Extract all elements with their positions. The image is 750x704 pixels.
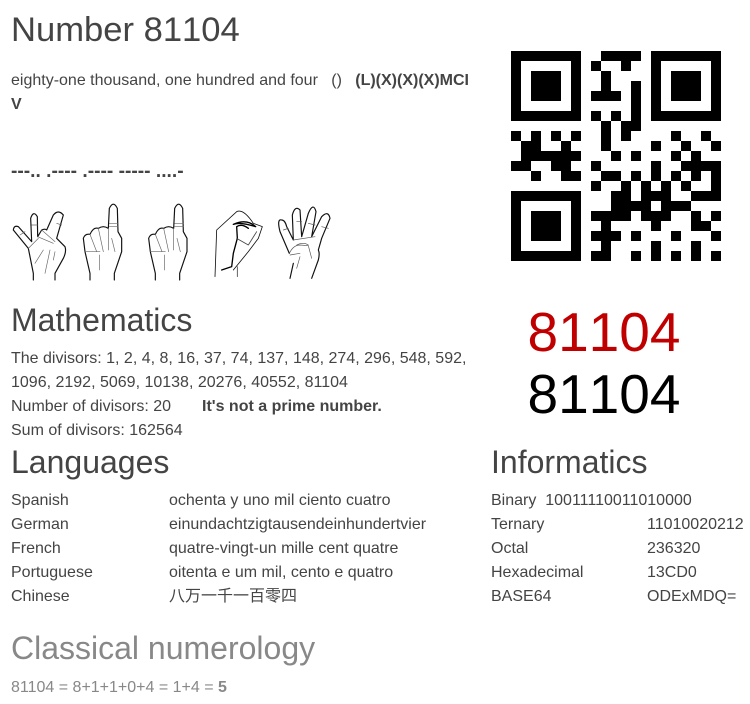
large number red: 81104: [528, 301, 680, 363]
number name in words and roman numeral: eighty-one thousand, one hundred and four () (L)(X)(X)(X)MCI: [11, 72, 469, 89]
binary: Binary 10011110011010000: [491, 492, 692, 509]
icon: hand sign 8: [13, 212, 66, 280]
translations: einundachtzigtausendeinhundertvier: [169, 516, 426, 533]
roman numeral wrapped line: V: [11, 96, 22, 113]
icon: hand sign 1: [83, 204, 122, 280]
base labels: Octal: [491, 540, 528, 557]
panel: mathematics: [11, 302, 466, 439]
language names: Chinese: [11, 588, 70, 605]
base values: ODExMDQ=: [647, 588, 736, 605]
number of divisors: Number of divisors: 20: [11, 398, 171, 415]
morse code: ---.. .---- .---- ----- ....-: [11, 161, 184, 182]
icon: hand sign 4: [279, 207, 330, 278]
base labels: Ternary: [491, 516, 544, 533]
heading: informatics: Informatics: [491, 444, 647, 480]
heading: classical numerology: Classical numerology: [11, 630, 315, 666]
large number black: 81104: [528, 363, 680, 425]
QR data modules: [511, 51, 721, 261]
base labels: Hexadecimal: [491, 564, 583, 581]
panel: languages: [11, 444, 426, 606]
icon: hand sign 1: [149, 204, 187, 280]
panel: number names: [11, 72, 469, 182]
language names: German: [11, 516, 69, 533]
translations: quatre-vingt-un mille cent quatre: [169, 540, 398, 557]
base labels: BASE64: [491, 588, 551, 605]
base values: 11010020212: [647, 516, 744, 533]
translations: oitenta e um mil, cento e quatro: [169, 564, 393, 581]
panel: classical numerology: [11, 630, 315, 696]
chinese translation: 八万一千一百零四: [169, 582, 297, 606]
divisors list: 1096, 2192, 5069, 10138, 20276, 40552, 81104: [11, 374, 348, 391]
sum of divisors: Sum of divisors: 162564: [11, 422, 183, 439]
translations: ochenta y uno mil ciento cuatro: [169, 492, 390, 509]
QR code: [511, 51, 721, 261]
numerology formula: 81104 = 8+1+1+0+4 = 1+4 = 5: [11, 679, 227, 696]
heading: languages: Languages: [11, 444, 169, 480]
language names: [11, 492, 93, 605]
heading: mathematics: Mathematics: [11, 302, 192, 338]
icon: hand sign 0: [215, 211, 262, 277]
divisors list: The divisors: 1, 2, 4, 8, 16, 37, 74, 137, 148, 274, 296, 548, 592,: [11, 350, 466, 367]
panel: informatics: [491, 444, 744, 605]
title: Number 81104: [11, 11, 240, 49]
language names: Spanish: [11, 492, 69, 509]
QR finder patterns: [511, 51, 721, 261]
prime statement: It's not a prime number.: [202, 398, 382, 415]
base values: [647, 516, 744, 605]
base labels: [491, 516, 583, 605]
language names: Portuguese: [11, 564, 93, 581]
sign language hands: [12, 204, 331, 281]
base values: 13CD0: [647, 564, 697, 581]
translations: [169, 492, 426, 581]
divisors list: [11, 350, 466, 391]
base values: 236320: [647, 540, 700, 557]
language names: French: [11, 540, 61, 557]
